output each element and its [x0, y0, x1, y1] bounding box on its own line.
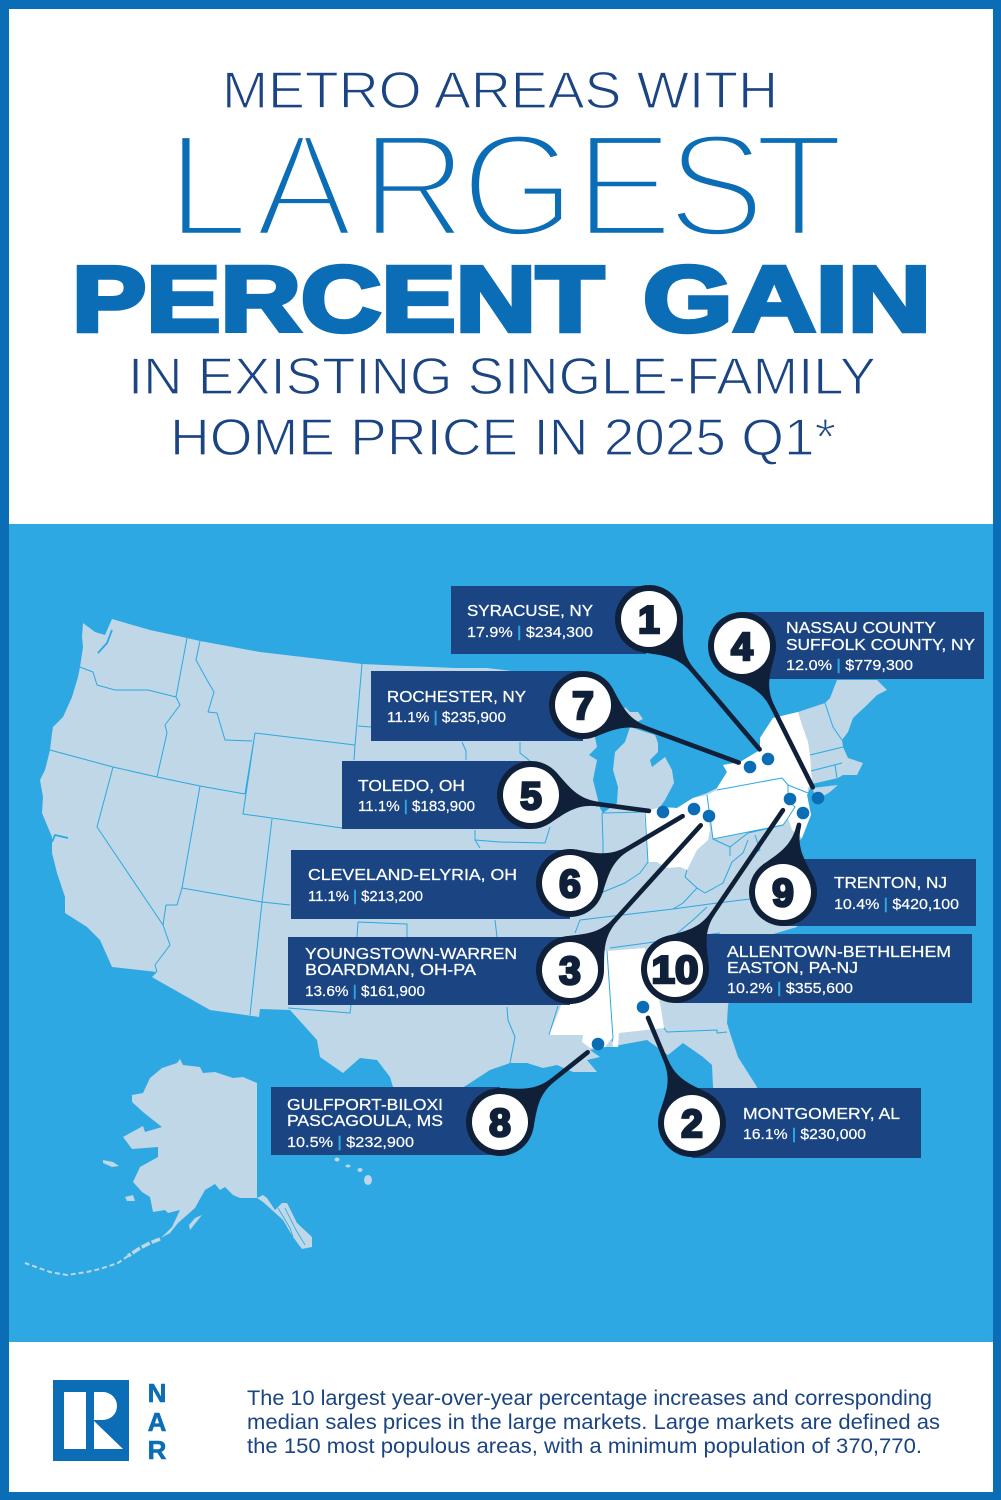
callout 4: nassau county: SUFFOLK COUNTY, NY [786, 637, 975, 654]
title line: percent: PERCENT [72, 247, 604, 351]
pin 10 [628, 791, 811, 1016]
pin 9: 9 [772, 872, 794, 915]
callout 4: nassau county [696, 600, 984, 803]
callout 1: syracuse: 17.9% | $234,300 [467, 625, 593, 641]
new jersey [788, 785, 811, 838]
new york [717, 712, 812, 793]
puget sound and san francisco bay [52, 630, 112, 842]
callout 6: cleveland: 11.1% | $213,200 [308, 889, 423, 905]
callout 2: montgomery [617, 1005, 921, 1167]
callout 10: allentown: 10.2% | $355,600 [727, 981, 853, 997]
callout 9: trenton [742, 817, 976, 933]
callout 4: nassau county: NASSAU COUNTY [786, 620, 936, 637]
callout 10: allentown: EASTON, PA-NJ [727, 960, 858, 977]
callout 7: rochester [371, 661, 750, 794]
pennsylvania [707, 778, 795, 839]
callout 4: nassau county: 12.0% | $779,300 [786, 658, 913, 674]
logo: realtor R mark [53, 1380, 129, 1461]
callout 7: rochester: 11.1% | $235,900 [387, 710, 506, 726]
callout 6: cleveland: CLEVELAND-ELYRIA, OH [308, 867, 517, 884]
title line: in existing single-family: IN EXISTING SINGLE-FAMILY [128, 348, 876, 406]
pin 7: 7 [572, 685, 594, 728]
pin 9 [742, 817, 832, 933]
pin 1 [601, 571, 786, 771]
callout 8: gulfport [271, 1026, 609, 1170]
pin 8: 8 [489, 1102, 511, 1145]
title line: gain: GAIN [643, 247, 931, 351]
title line: metro areas with: METRO AREAS WITH [222, 62, 778, 120]
hawaii [334, 1158, 372, 1185]
pin 3 [522, 803, 726, 1018]
pin 5: 5 [520, 775, 542, 818]
upper michigan tip [622, 707, 643, 725]
callout 1: syracuse: SYRACUSE, NY [467, 603, 593, 620]
state borders [50, 638, 843, 1063]
pin 2 [617, 1005, 736, 1167]
highlighted states [549, 712, 812, 1048]
footnote text: median sales prices in the large markets. Large markets are defined as [247, 1411, 940, 1434]
title line: home price: HOME PRICE IN 2025 Q1* [170, 409, 836, 467]
callout 10: allentown: ALLENTOWN-BETHLEHEM [727, 944, 951, 961]
panel: map background [9, 524, 993, 1342]
callout 3: youngstown [288, 803, 726, 1018]
pin 4 [696, 600, 843, 803]
pin 8 [452, 1026, 609, 1170]
callout 9: trenton: 10.4% | $420,100 [834, 897, 959, 913]
callout 6: cleveland [291, 787, 700, 930]
alaskan islands [103, 1160, 202, 1230]
alabama and mississippi [549, 948, 664, 1048]
southeast alaska fjords [278, 1208, 305, 1245]
ohio [644, 795, 710, 870]
callout 10: allentown [628, 791, 972, 1016]
footnote text: the 150 most populous areas, with a minimum population of 370,770. [247, 1435, 922, 1458]
footnote text [247, 1387, 940, 1458]
callout 9: trenton: TRENTON, NJ [834, 875, 947, 892]
pin 2: 2 [681, 1103, 703, 1146]
callout 8: gulfport: 10.5% | $232,900 [287, 1135, 414, 1151]
callout 5: toledo: 11.1% | $183,900 [358, 799, 475, 815]
callout 5: toledo [342, 757, 653, 845]
callout 3: youngstown: 13.6% | $161,900 [305, 984, 425, 1000]
callout 2: montgomery: 16.1% | $230,000 [743, 1127, 866, 1143]
pin 5 [493, 757, 653, 845]
logo: NAR letters [148, 1378, 167, 1465]
pin 6: 6 [559, 863, 581, 906]
pin 3: 3 [559, 950, 581, 993]
title [72, 62, 931, 467]
pin 6 [523, 787, 700, 930]
contiguous states landmass [40, 619, 887, 1145]
pin 1: 1 [638, 599, 660, 642]
metro location dots [592, 753, 824, 1050]
footnote text: The 10 largest year-over-year percentage increases and corresponding [247, 1387, 932, 1410]
pin 4: 4 [731, 626, 753, 669]
callout 2: montgomery: MONTGOMERY, AL [743, 1106, 900, 1123]
callout 3: youngstown: YOUNGSTOWN-WARREN [305, 946, 517, 963]
highlighted state borders [602, 778, 808, 1042]
callout 3: youngstown: BOARDMAN, OH-PA [305, 962, 476, 979]
callout 5: toledo: TOLEDO, OH [358, 778, 465, 795]
title line: largest: LARGEST [167, 104, 844, 268]
alaska [123, 1059, 312, 1249]
callout 8: gulfport: PASCAGOULA, MS [287, 1113, 443, 1130]
callout 1: syracuse [451, 571, 786, 771]
pin 10: 10 [652, 949, 698, 992]
aleutian islands [25, 1239, 160, 1275]
callout 8: gulfport: GULFPORT-BILOXI [287, 1097, 443, 1114]
logo: NAR letters: N [148, 1378, 166, 1408]
pin 7 [539, 661, 750, 794]
callout 7: rochester: ROCHESTER, NY [387, 689, 526, 706]
map of the United States [25, 619, 887, 1275]
logo: NAR letters: R [148, 1435, 167, 1465]
long island [812, 785, 838, 800]
logo: NAR letters: A [148, 1407, 167, 1437]
